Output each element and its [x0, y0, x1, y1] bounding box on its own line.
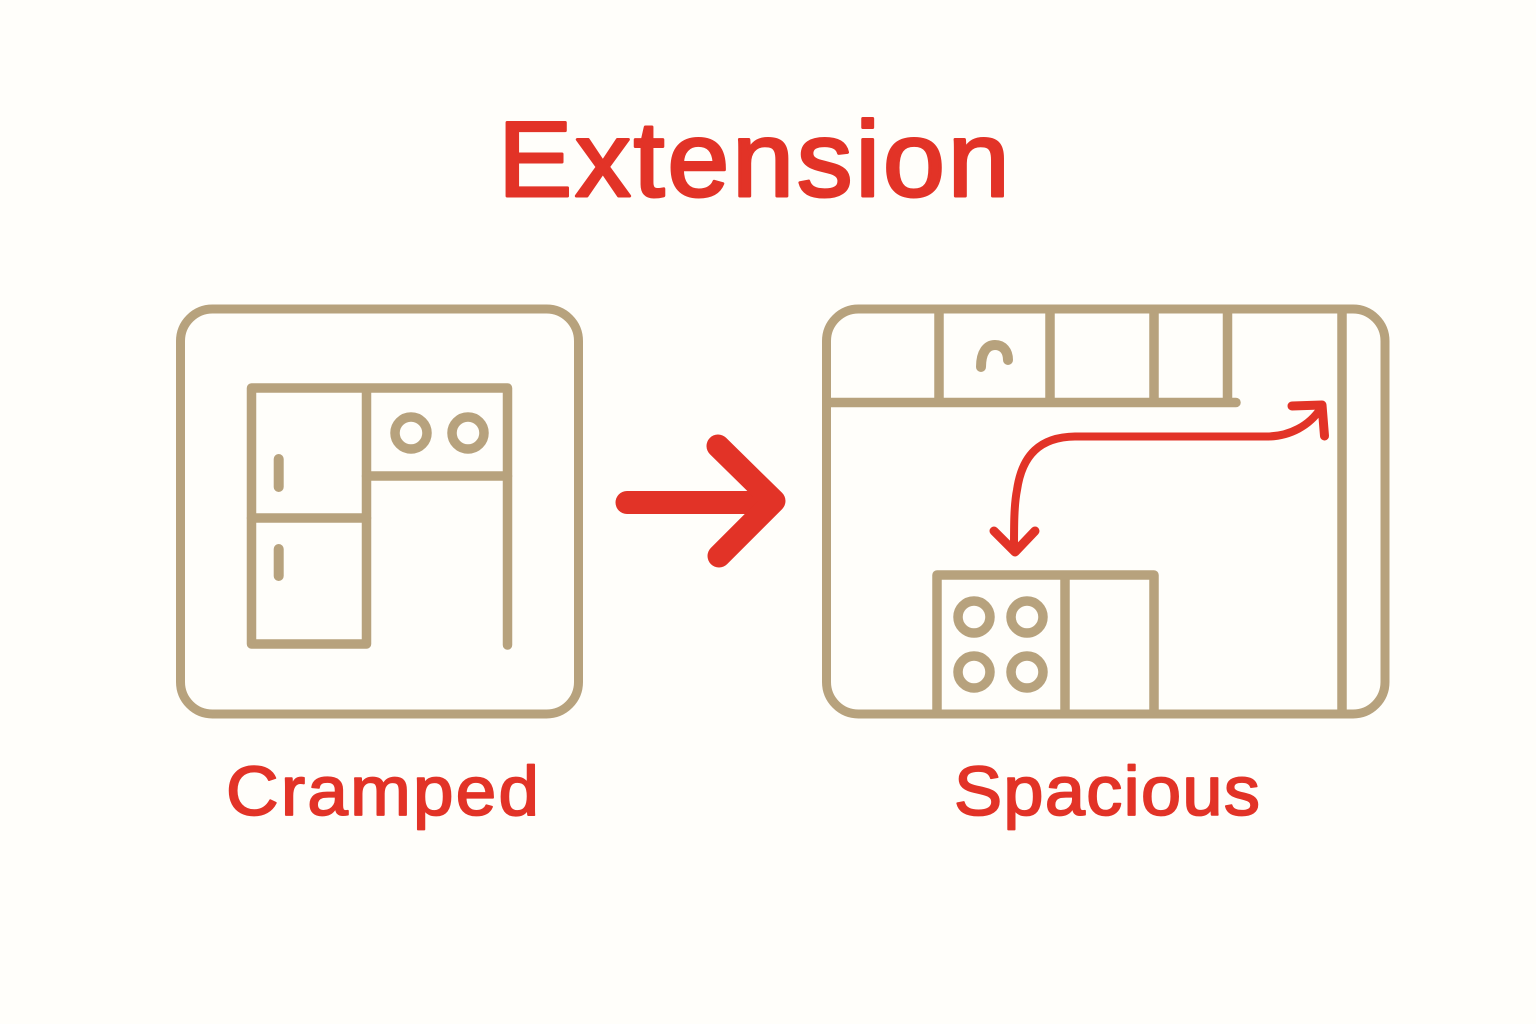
label: cramped: Cramped [226, 752, 539, 831]
label: spacious: Spacious [954, 753, 1260, 831]
title: Extension [498, 100, 1010, 220]
icon: spacious kitchen [826, 309, 1385, 714]
icon: cramped kitchen [180, 309, 578, 714]
arrow: space between zones [994, 405, 1324, 552]
arrow: extension [627, 446, 774, 556]
